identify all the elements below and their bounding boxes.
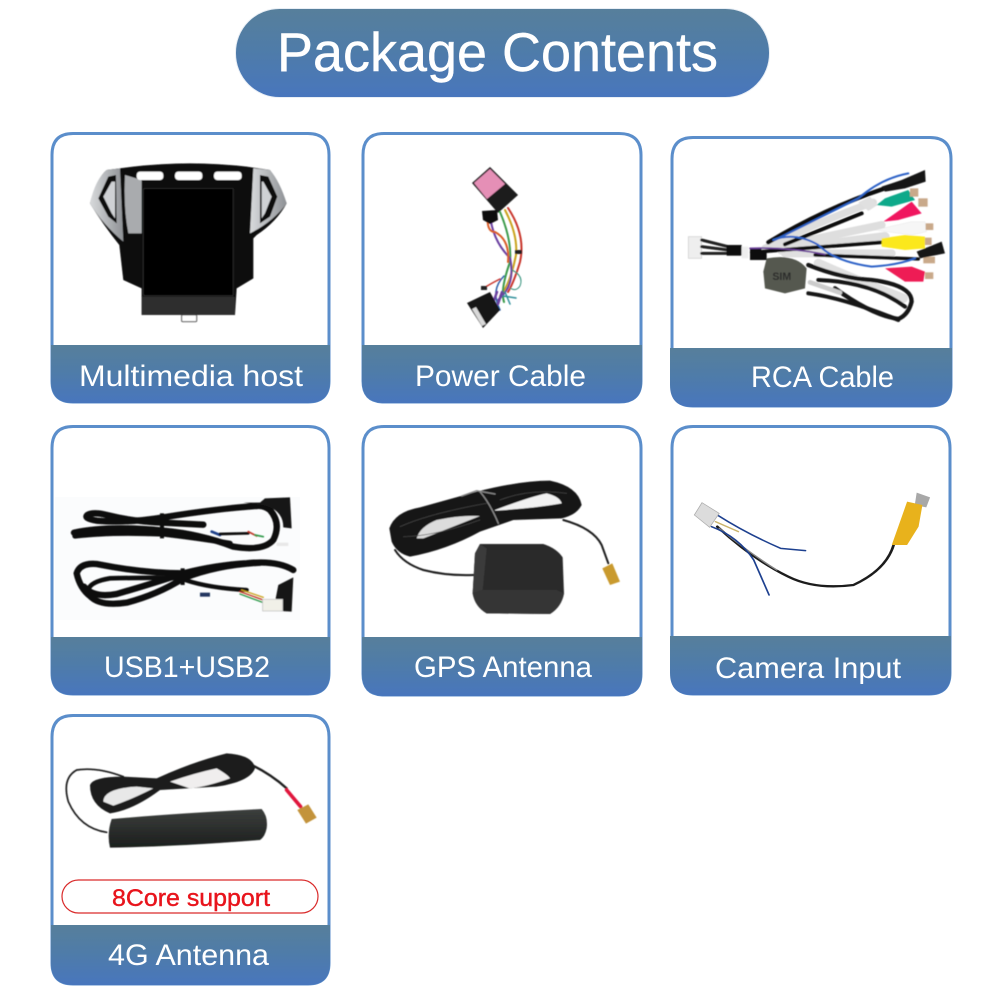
label bar <box>51 925 330 985</box>
label: USB1+USB2 <box>104 651 270 684</box>
icon: GPS antenna <box>389 481 620 614</box>
card frame <box>52 426 329 694</box>
panel: GPS antenna <box>362 426 642 696</box>
label bar <box>670 636 951 695</box>
icon: 4G antenna <box>66 753 317 848</box>
label: Camera Input <box>715 652 902 685</box>
label: RCA Cable <box>751 361 894 394</box>
label bar <box>51 345 330 403</box>
panel: USB cables <box>51 426 330 695</box>
icon: RCA harness: SIM <box>772 271 791 283</box>
label bar <box>362 345 642 403</box>
card frame <box>52 716 329 984</box>
card frame <box>363 426 641 695</box>
badge: 8Core support: 8Core support <box>112 885 270 912</box>
label bar <box>670 348 952 407</box>
label: 4G Antenna <box>108 939 269 972</box>
panel: RCA cable <box>670 138 952 407</box>
title: Package Contents <box>277 21 718 83</box>
title <box>236 8 770 98</box>
card frame <box>52 134 329 402</box>
label: GPS Antenna <box>414 651 592 684</box>
icon: USB cables <box>55 497 300 620</box>
icon: RCA harness <box>688 170 945 320</box>
panel: power cable <box>362 134 642 403</box>
icon: head unit <box>90 163 287 322</box>
label: Multimedia host <box>79 360 304 393</box>
badge: 8Core support <box>62 880 318 913</box>
label bar <box>51 637 330 695</box>
panel: 4G antenna <box>51 716 330 985</box>
card frame <box>672 138 951 406</box>
panel: multimedia host <box>51 134 330 403</box>
label: Power Cable <box>415 360 586 393</box>
card frame <box>672 426 950 694</box>
icon: power harness <box>467 167 522 328</box>
photo backdrop <box>55 497 300 620</box>
panel: camera input <box>670 426 951 695</box>
icon: camera cable <box>694 493 930 595</box>
label bar <box>362 637 642 696</box>
card frame <box>363 134 641 402</box>
